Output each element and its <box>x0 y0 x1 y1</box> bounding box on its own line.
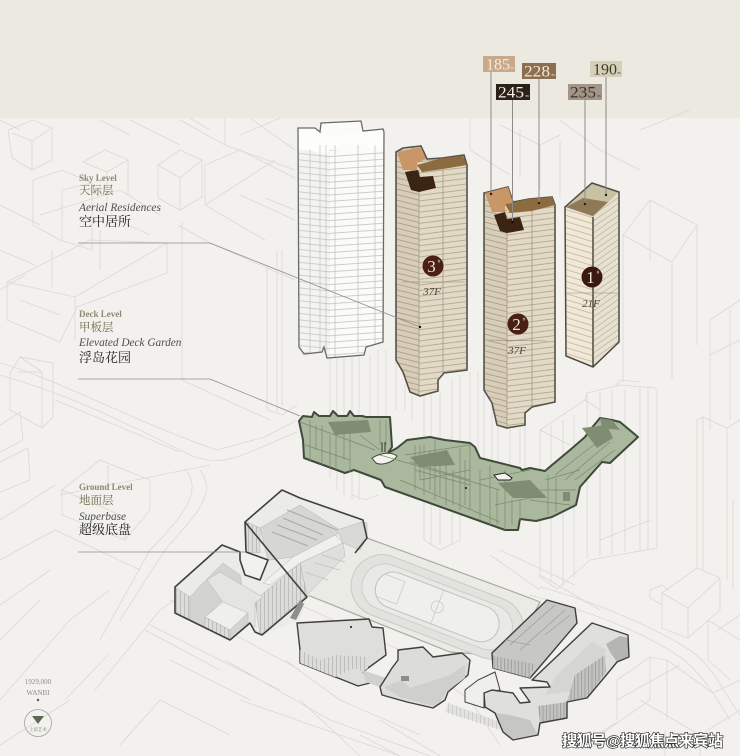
tower 3 badge: # <box>438 260 441 265</box>
height tag 228: 228 <box>524 64 550 80</box>
height tag 235 <box>568 84 602 205</box>
label: deck level <box>78 309 182 365</box>
tower 1 floors label <box>567 293 617 310</box>
tower 2 badge: # <box>523 318 526 323</box>
leader lines <box>78 243 421 552</box>
school building B4 <box>484 623 629 740</box>
tower 2 <box>482 185 557 430</box>
height tag 190: m <box>617 70 621 75</box>
label: deck level: 甲板层 <box>79 320 114 334</box>
building A outline <box>175 490 367 640</box>
height tag 228: m <box>551 72 555 77</box>
deck planted roofs <box>328 418 620 501</box>
label: deck level: 浮岛花园 <box>79 350 131 365</box>
deck courtyard opening <box>372 453 397 464</box>
tower 3 roof <box>397 147 467 192</box>
tower 1 badge: 1 <box>586 268 595 287</box>
label: sky level <box>78 173 161 229</box>
label: sky level: 空中居所 <box>79 214 131 229</box>
height tag 245: m <box>525 93 529 98</box>
brand logo <box>24 678 52 736</box>
sports ground <box>300 538 540 668</box>
building A ramp <box>290 600 304 620</box>
height tag 185 <box>483 56 515 195</box>
tower 2 badge <box>508 314 528 334</box>
tower 2 roof <box>485 187 555 233</box>
height tag 228 <box>522 63 556 204</box>
school building B2 <box>380 647 470 708</box>
watermark: 搜狐号@搜狐焦点来宾站 <box>562 732 723 750</box>
top textured band <box>0 0 740 118</box>
height tag 185: m <box>510 65 514 70</box>
label: sky level: Aerial Residences <box>78 202 161 214</box>
deck structure lines <box>300 420 615 530</box>
height tag 245 <box>496 84 530 223</box>
label: ground level: 地面层 <box>79 493 114 507</box>
tower 3 floors label <box>402 282 465 298</box>
tower 1 <box>565 183 619 367</box>
tower 2 floors label <box>489 340 547 357</box>
height tag 235: m <box>597 93 601 98</box>
building A facades <box>175 505 367 640</box>
label: sky level: Sky Level <box>79 173 117 183</box>
label: deck level: Elevated Deck Garden <box>78 337 182 349</box>
height tag 190 <box>590 61 622 196</box>
tower 1 floors label: 21F <box>582 298 600 310</box>
running track <box>342 546 532 668</box>
deck garden podium <box>299 411 638 530</box>
label: ground level <box>79 482 133 537</box>
deck opening dark edge <box>494 473 512 480</box>
height tag 235: 235 <box>570 84 596 102</box>
white ghost tower <box>296 121 386 365</box>
tower 3 badge <box>422 256 444 276</box>
tower 3 <box>394 145 469 400</box>
tower 2 floors label: 37F <box>507 345 526 357</box>
brand logo: 1929,000 <box>25 678 52 686</box>
tower 1 badge <box>582 266 602 288</box>
tower 1 badge: # <box>597 271 600 276</box>
tower 2 badge: 2 <box>512 315 521 334</box>
school building C small block <box>445 672 500 730</box>
tower 3 badge: 3 <box>427 257 436 276</box>
label: ground level: Ground Level <box>79 482 133 492</box>
connector between B1 and B2 <box>362 670 392 690</box>
height tag 245: 245 <box>498 84 524 102</box>
height tag 190: 190 <box>593 62 617 78</box>
school building A <box>175 490 367 640</box>
label: deck level: Deck Level <box>79 309 122 319</box>
school building B1 <box>297 619 386 686</box>
label: ground level: Superbase <box>79 511 126 523</box>
brand logo: WANBI <box>27 689 50 697</box>
height tag 185: 185 <box>486 56 510 74</box>
label: sky level: 天际层 <box>79 184 114 197</box>
label: ground level: 超级底盘 <box>79 522 131 537</box>
brand logo: 上滨艺术 <box>29 726 47 733</box>
school building B3 <box>492 600 577 678</box>
tower 3 floors label: 37F <box>422 286 441 298</box>
